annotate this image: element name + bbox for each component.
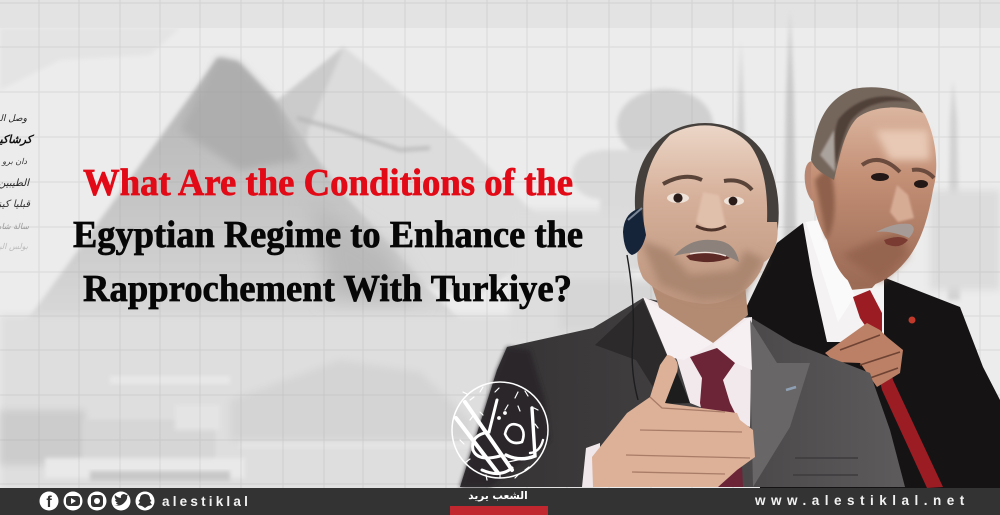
right lapel [750,320,810,487]
footer slogan: الشعب يريد [468,490,528,502]
brows [663,177,702,184]
brows and eyes [862,160,900,172]
face shading [640,240,765,300]
moustache and mouth [876,224,914,238]
nose [696,192,726,230]
mouth [686,252,730,262]
head [637,125,778,304]
social icons: f [46,494,52,511]
neck [650,280,748,343]
sleeve shadow [460,347,550,487]
headset [623,208,646,255]
left lapel [595,300,687,403]
pyramids [276,47,560,300]
title [73,162,583,310]
suit body [460,298,905,487]
footer bar [0,488,1000,515]
shirt collar [803,220,884,342]
title line 2: Egyptian Regime to Enhance the [73,214,583,256]
shirt [643,297,752,427]
hand [592,355,755,487]
lapel buttonhole [786,387,796,390]
head [811,88,936,286]
mosque silhouette [572,10,960,340]
footer red tab [450,506,548,515]
earphone wire [627,255,638,400]
website: www.alestiklal.net [754,493,970,508]
social icons [40,492,154,511]
city band [0,315,600,490]
neck [822,225,895,290]
nose [890,185,914,222]
suit hand [825,323,903,387]
logo: circular calligraphy seal [452,382,548,480]
handle: alestiklal [162,494,251,509]
tie [690,348,743,487]
moustache [674,240,739,262]
title line 3: Rapprochement With Turkiye? [83,268,572,310]
shirt cuff [582,443,600,487]
suit [745,223,1000,488]
person: el-Sisi (front) [460,123,905,487]
person: Erdogan (right, behind) [745,87,1000,488]
title line 1 (red): What Are the Conditions of the [83,162,573,204]
lapel pin [908,316,916,324]
tie [853,290,943,488]
collar flap [806,220,855,322]
ear [802,160,826,204]
pocket [793,458,858,475]
manuscript text fragment [0,114,35,251]
hair [811,87,923,180]
collars [643,297,713,360]
eyes [667,193,689,203]
hair [635,123,779,240]
face shading [815,165,835,240]
